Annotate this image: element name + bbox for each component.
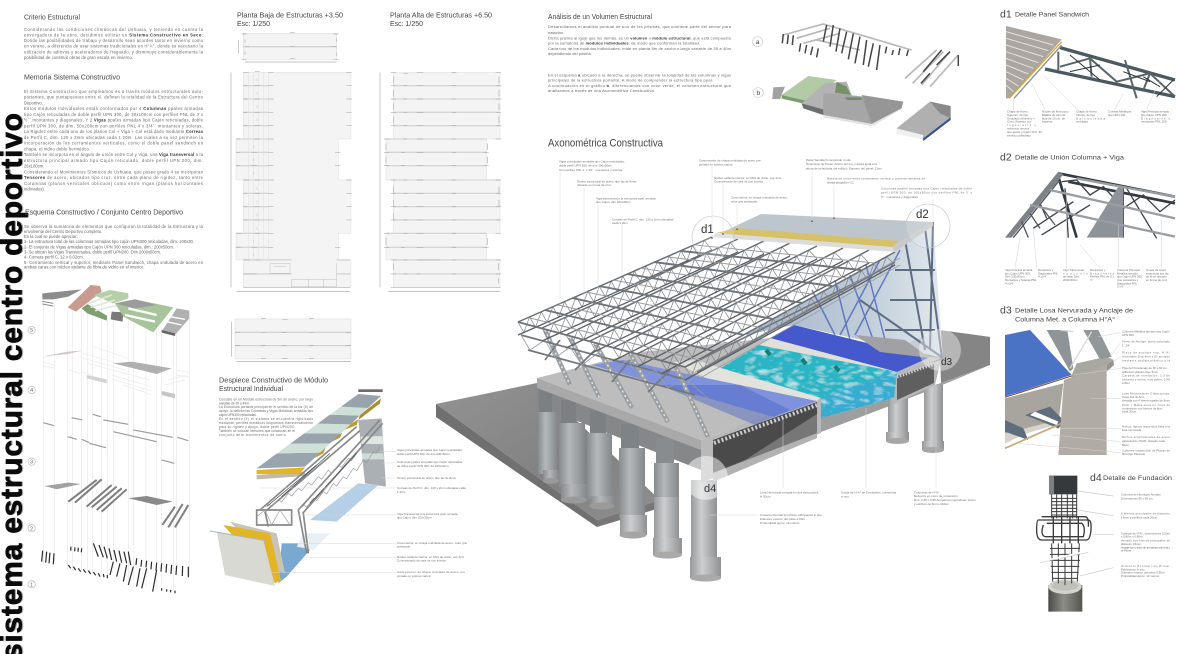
heading: planta alta xyxy=(390,12,492,28)
callouts: d2: estructural tipo lac xyxy=(1146,271,1169,275)
callouts: d3: Losa Nervurada en 2 direcciones. xyxy=(1122,391,1170,395)
callouts: d1: espesor. xyxy=(1042,120,1053,124)
diagram b: envelope volumes: b xyxy=(756,90,760,97)
panel: planta baja xyxy=(231,12,352,362)
wall sandwich panels xyxy=(210,522,285,586)
platform structure xyxy=(537,338,941,483)
callouts: d1: Núcleo de fibra poco xyxy=(1042,110,1069,114)
glazed gable and lattice xyxy=(745,222,943,358)
blue floors xyxy=(592,325,928,425)
callouts: d1: Bitálitis de tubo de xyxy=(1042,113,1066,117)
heading: d4 xyxy=(1090,472,1172,484)
heading: criterio estructural: Criterio Estructural xyxy=(24,12,80,22)
callouts: d1: tipo UPN 100 xyxy=(1108,113,1126,117)
callouts: d2: 4´x3/4´´. xyxy=(1038,275,1049,279)
number markers: 1 xyxy=(30,582,33,588)
text block: memoria: La Rigidez entre cada uno de los planos Col + Viga + Col está dado mediante Correas xyxy=(24,129,204,134)
callouts: d1: Viga Principal armado xyxy=(1141,110,1170,114)
steel frames xyxy=(257,420,383,553)
panel: criterio estructural xyxy=(24,12,204,60)
number markers: 3 xyxy=(30,460,33,466)
callouts: d1: servicio polisulfato xyxy=(1007,134,1031,138)
text block: despiece: conjunto ante movimientos de suelo. xyxy=(219,433,287,437)
callouts: d2: Montantes y Soleras PNL xyxy=(1005,278,1037,282)
callouts: d1: Diagonales y xyxy=(1141,116,1171,120)
swimming pool xyxy=(721,345,897,418)
text block: despiece: variable de 35 a 40m. xyxy=(219,401,250,405)
callouts: d2: 4´x3/4´ xyxy=(1005,281,1014,285)
callouts: d4: Profundidad aprox: 12 metros xyxy=(1121,574,1160,578)
callouts: d3 xyxy=(1122,330,1171,456)
callouts: despiece: Correas de Perfil C, dim. 120 x 2mm ubicadas cada xyxy=(397,486,466,490)
text block: despiece: La Estructura portante principal en el sentido de la luz (X) de xyxy=(219,405,313,409)
callouts: axonometrica: Profundidad aprox: 12 metros xyxy=(760,521,800,525)
text block: despiece: para su rigidez y apoyo, doble perfil UPN200. xyxy=(219,425,295,429)
callouts: d1: Cinc). Espesor con xyxy=(1007,120,1032,124)
detail circle d2 xyxy=(906,204,950,248)
callouts: d3: 8mm y Malla simá en zona de xyxy=(1122,403,1170,407)
text block: despiece: apoyo, lo definen las Columnas y Vigas Metálicas armadas tipo xyxy=(219,409,313,413)
callouts: axonometrica xyxy=(559,158,976,525)
heading: d2 xyxy=(1000,152,1124,164)
callouts: d1: Chapa de Acero xyxy=(1007,110,1028,114)
callouts: axonometrica: Babeta de unión entre cerramiento vertical y cubierta metálica de xyxy=(827,176,925,180)
callouts: axonometrica: in situ. xyxy=(841,494,850,498)
callouts: axonometrica: Cara interior, en chapa ondulada de acero, xyxy=(731,196,788,200)
text block: criterio: Considerando las condiciones climáticas del Ushuaia, y teniendo en cuenta la xyxy=(24,27,204,32)
callouts: d3: compresión con hierros de 8cm xyxy=(1122,406,1163,410)
roof sandwich bands xyxy=(257,394,381,479)
callouts: d3: cemento y arena, muy pobre, 10% xyxy=(1122,377,1170,381)
callouts: d1: montantes PNL 100 xyxy=(1141,120,1167,124)
callouts: despiece: Viga Transversal a la estructura ppal. armada xyxy=(397,512,458,516)
roof sandwich plate xyxy=(711,214,933,252)
heading: axonometrica constructiva: Axonométrica Constructiva xyxy=(548,138,664,150)
callouts: axonometrica: y estribos de 6mm c/20cm xyxy=(914,502,950,506)
text block: criterio xyxy=(24,27,204,60)
callouts: despiece: Núcleo aislante interior, en fibra de vidrio, esp 4cm xyxy=(397,555,465,559)
heading: d1: d1 xyxy=(1000,8,1012,20)
callouts: d4: diámetro 16mm. xyxy=(1121,542,1142,546)
callouts: d1: ondulada xyxy=(1076,120,1088,124)
callouts: axonometrica: ½´´ montantes y diagonales xyxy=(881,195,919,199)
text block: memoria: chapa, el vidrio doble hermético. xyxy=(24,146,90,151)
text block: analisis: dependiendo del prisma. xyxy=(548,51,592,56)
text block: despiece xyxy=(219,398,313,437)
layer 5: envelope volumes xyxy=(42,285,189,336)
callouts: d2: Diagonales PNL xyxy=(1038,271,1059,275)
text block: despiece: En el sentido (Y) el sistema se encuentra rigidizado xyxy=(219,417,313,421)
callouts: d1: lada de 10 cm. de xyxy=(1042,116,1065,120)
heading: planta alta: Esc: 1/250 xyxy=(390,21,423,28)
number markers: 4 xyxy=(30,388,33,394)
callouts: d3: Cañones suspendido de Placas de xyxy=(1122,449,1170,453)
drawing: panel sandwich xyxy=(1006,26,1175,110)
callouts: d2: Perfiles PNL de 3´x xyxy=(1090,275,1115,279)
callouts: d2: armada: Dim: xyxy=(1063,275,1080,279)
callouts: d3: 80cm. xyxy=(1122,443,1130,447)
detail circle d1 xyxy=(692,216,734,258)
text block: esquema: En la cual se puede apreciar: xyxy=(24,234,78,239)
main axonometric drawing xyxy=(436,158,990,582)
callouts: axonometrica: Viga transversal a la estructura ppal. armada xyxy=(596,197,656,201)
diagram a: steel structure xyxy=(753,24,958,87)
ground slabs xyxy=(436,330,990,527)
text block: memoria: 25x100cm. xyxy=(24,164,44,169)
callouts: axonometrica: Diámetro exterior del pilote 0,80m xyxy=(760,517,806,521)
callouts: d2: Viga Transversal xyxy=(1063,268,1084,272)
number markers xyxy=(28,326,35,588)
callouts: axonometrica: Con perfiles PNL 4´ x 3/4´´ montantes y soleras. xyxy=(559,168,623,172)
text block: esquema: ambas caras con núcleo aislante de fibra de vidrio en el interior. xyxy=(24,265,144,270)
panel: detalle d2 xyxy=(1000,152,1175,289)
heading: esquema: Esquema Constructivo / Conjunto Centro Deportivo xyxy=(25,208,183,216)
heading: planta alta: Planta Alta de Estructuras +6.50 xyxy=(390,12,492,20)
callout leader lines xyxy=(560,167,936,515)
callouts: d2: Con montantes y xyxy=(1117,278,1139,282)
callouts: d4: Columna de Hormigón Armado xyxy=(1121,492,1161,496)
panel: detalle d3 xyxy=(1000,304,1171,456)
heading: planta baja: Planta Baja de Estructuras +3.50 xyxy=(237,12,343,20)
callouts: d1: Inferior, de tipo xyxy=(1076,113,1096,117)
callouts: d4: Anclaje como inicio de armadura columna y xyxy=(1121,545,1171,549)
heading: d1: Detalle Panel Sandwich xyxy=(1015,12,1089,18)
detail circle d3 xyxy=(919,329,961,371)
detail circle d1: d1 xyxy=(701,224,714,236)
callouts: axonometrica: Cara exterior de chapa ondulada de acero pre- xyxy=(699,159,761,163)
callouts: despiece: de doble perfil UPN 300, de 100x30cm. xyxy=(397,464,450,468)
callouts: d2: en forma de cruz xyxy=(1146,278,1168,282)
number markers: 2 xyxy=(30,526,33,532)
callouts: despiece: 1,20m xyxy=(397,490,406,494)
callouts: despiece: tipo Cajón, dim 100x25cm xyxy=(397,516,432,520)
callouts: despiece: Cara exterior, de chapa ondulada de acero, pre xyxy=(397,570,465,574)
drawing: losa y anclaje xyxy=(1005,330,1121,455)
exploded structural diagram xyxy=(28,285,189,593)
callouts: d3: Inoxidable Esp:4cm y Ø: anclado xyxy=(1122,355,1170,359)
callouts: d1 xyxy=(1007,110,1171,138)
callouts: d2: Viga Principal armada xyxy=(1005,268,1033,272)
right piles xyxy=(886,385,944,453)
heading: d3: d3 xyxy=(1000,304,1012,316)
callouts: axonometrica: Núcleo aislante interior, en fibra de vidrio, esp 4cm. xyxy=(714,176,782,180)
text block: analisis: principales de la estructura portante. A modo de comprender la estructura tipo ppal. xyxy=(548,78,713,83)
diagram a: steel structure: a xyxy=(756,39,760,46)
text block: memoria: El Sistema Constructivo que empleamos es a través módulos estructurales auto- xyxy=(24,89,204,94)
callouts: d3: Nichos longitudinales de acero xyxy=(1122,435,1170,439)
callouts: d3: fibra tipo Plancelit xyxy=(1122,452,1145,456)
layer 3: transverse beams xyxy=(43,414,188,463)
callouts: despiece: Conmplexado de cara int con interior. xyxy=(397,558,447,562)
diagram b: envelope volumes xyxy=(753,76,951,141)
callouts: axonometrica: cada 1,20m xyxy=(612,221,628,225)
callouts: despiece: Cara interior, en chapa ondulada de acero, color gris xyxy=(397,541,467,545)
callouts: d3: a 8cm xyxy=(1122,381,1130,385)
drawing: fundacion xyxy=(1037,476,1113,612)
heading: despiece xyxy=(219,376,328,393)
callouts: axonometrica: chapa plegada n°22. xyxy=(827,181,855,185)
callouts: d2: de 8mm ubicado xyxy=(1146,275,1167,279)
text block: analisis: natación. xyxy=(548,30,564,35)
callouts: d2: 2000x50cm xyxy=(1063,278,1078,282)
callouts: axonometrica: Correas de Perfil C, dim. 120 x 2mm ubicadas xyxy=(612,217,674,221)
heading: d4: d4 xyxy=(1090,472,1102,484)
text block: esquema: envolvente del Centro Deportivo completo. xyxy=(24,229,102,234)
callouts: despiece: doble perfil UPN 300, de dim 200x50cm. xyxy=(397,452,451,456)
callouts: d1: Ingeniería y xyxy=(1007,123,1037,127)
callouts: d4: 16mm y estribos cada 20cm xyxy=(1121,515,1158,519)
callouts: axonometrica: Refuerzo en muro de contención xyxy=(914,494,958,498)
heading: despiece: Despiece Constructivo de Módulo xyxy=(219,376,328,384)
callouts: d3: Piso de Porcelanato de 60 x 60 cm. xyxy=(1122,366,1168,370)
callouts: d2: Montantes y xyxy=(1038,268,1054,272)
callouts: axonometrica: Cimiento Puntual tipo Pilote, fabricación in situ. xyxy=(760,513,823,517)
callouts: d1: refuerzos nervios xyxy=(1007,126,1030,130)
detail circle d2: d2 xyxy=(916,209,929,221)
text block: despiece: También se colocan tensores que colaboran en el xyxy=(219,429,295,433)
callouts: d3: Perno de Anclaje, acero calculado xyxy=(1122,340,1170,344)
callouts: d3: Columna Metálica armado tipo Cajón xyxy=(1122,330,1170,334)
callouts: axonometrica: Grada de H°A° de 5 peldaños, construida xyxy=(841,490,896,494)
callouts: d4: Cimiento Puntual tipo Pilote. xyxy=(1121,564,1170,568)
callouts: d1: Ondulado (Aluminio + xyxy=(1007,116,1035,120)
panel: analisis de un volumen xyxy=(548,12,958,141)
heading: d3: Detalle Losa Nervurada y Anclaje de xyxy=(1015,308,1133,314)
callouts: axonometrica: Panel Sandwich construido in situ. xyxy=(806,158,852,162)
text block: memoria: tipo Cajón reticuladas de doble perfil UPN 300, de 30x100cm con perfiles PNL de 3´x xyxy=(24,112,204,117)
text block: analisis: En el esquema a ubicado a la derecha, se puede observar la totalidad de las columnas y vigas xyxy=(548,72,731,78)
callouts: d4: Armado con hierros principales de xyxy=(1121,539,1170,543)
callouts: d3: Placa de anclaje sup. H°A° xyxy=(1122,351,1170,355)
callouts: d2: Dim: 200x50cm. xyxy=(1005,275,1025,279)
callouts: d1: Chapa de Acero xyxy=(1076,110,1097,114)
left piles and shafts xyxy=(537,385,721,582)
text block: criterio: Donde las posibilidades de trabajo y desarrollo sean acordes tanto en invierno como xyxy=(24,38,204,43)
callouts: d4: Dimensiones 80 x 60 cm. xyxy=(1121,496,1154,500)
text block: memoria: Columnas (planos verticales oblicuos) como entre Vigas (planos horizontales xyxy=(24,181,203,186)
text block: memoria: Estos módulos individuales están conformados por 4 Columnas ppales armadas xyxy=(24,106,203,111)
callouts: d3: Capa lisa de 5cm xyxy=(1122,395,1145,399)
callouts: d3: cada 20cm. xyxy=(1122,410,1137,414)
heading: analisis: Análisis de un Volumen Estructural xyxy=(548,12,652,21)
callouts: axonometrica: doble perfil UPN 300, de dim 200x50cm. xyxy=(559,163,613,167)
text block: memoria: Considerando el Movimientos Sísmicos de Ushuaia, que posee grado 4 se incorporan xyxy=(24,169,204,174)
text block: criterio: en verano, a diferencia de usar sistemas tradicionales en H°A°, donde es necesario la xyxy=(24,44,204,49)
callouts: d3: UPN 300 xyxy=(1122,333,1134,337)
callouts: d1: Galvanizada xyxy=(1076,116,1105,120)
callouts: d3: losa nervurada. xyxy=(1122,428,1142,432)
detail circle d3: d3 xyxy=(941,357,953,368)
callouts: d4: al Pilote. xyxy=(1121,549,1132,553)
callouts: d2 xyxy=(1005,268,1169,289)
panel: detalle d1 xyxy=(1000,8,1175,138)
text block: memoria: ½´´ montantes y diagonales. Y 2 Vigas ppales armadas tipo Cajón reticuladas, doble xyxy=(24,118,204,123)
callouts: d4: 6 Hierros principales de diámetro xyxy=(1121,511,1170,515)
callouts: d3: galvanizado 70x30, ubicado cada xyxy=(1122,439,1165,443)
text block: analisis: por la sumatoria de módulos individuales, de modo que conforman la totalidad. xyxy=(548,40,700,46)
text block: despiece: Consiste en un Módulo estructural de 5m de ancho, por largo xyxy=(219,398,313,402)
callouts: d2: tipo Cajón UPN 300 xyxy=(1005,271,1030,275)
roof truss grid xyxy=(518,237,895,380)
callouts: d3: Adhesivo plástico tipo: 5mm. xyxy=(1122,370,1159,374)
detail circle d4 xyxy=(684,456,728,500)
panel: detalle d4 xyxy=(1037,472,1172,612)
text block: analisis xyxy=(548,24,732,93)
callouts: d3: 1´ 1/4´ xyxy=(1122,344,1130,348)
drawing: union columna viga xyxy=(1005,172,1175,268)
text block: memoria: perfil UPN 300, de dim. 50x200cm con perfiles PNL 4´x 3/4´´ montantes y soleras. xyxy=(24,123,203,128)
callouts: axonometrica: ubicado en forma de cruz. xyxy=(577,183,612,187)
callouts: despiece: Tensor estructural de acero, tipo lac de 8mm xyxy=(397,476,457,480)
callouts: d2: Tensor de acero xyxy=(1146,268,1167,272)
text block: memoria: inclinados). xyxy=(24,187,45,192)
layer 1: columns xyxy=(42,543,188,593)
callouts: axonometrica: Tensor estructural de acero, tipo lac de 8mm, xyxy=(577,180,637,184)
callouts: axonometrica: perfil UPN 300, de 100x30cm con perfiles PNL de 3´ x xyxy=(881,190,972,194)
number markers: 5 xyxy=(30,328,33,334)
floor plan: planta alta xyxy=(380,72,501,292)
callouts: despiece: Vigas principales armadas tipo Cajón reticuladas, xyxy=(397,448,463,452)
exploded module drawing xyxy=(210,389,396,586)
layer 2: beams xyxy=(44,479,188,527)
callouts: axonometrica: Dimensión de Panel: Ancho útil 1m, y altura igual a la xyxy=(806,162,877,166)
callouts: d1: Correas Metálicas xyxy=(1108,110,1132,114)
callouts: axonometrica: color gris prelacado. xyxy=(731,199,758,203)
text block: analisis: A continuación en el gráfico b, diferenciamos con color verde, el volumen estructural que xyxy=(548,83,732,88)
text block: esquema xyxy=(24,224,204,270)
callouts: d2: Columna Principal xyxy=(1117,268,1140,272)
callouts: axonometrica: Columnas de H°A° xyxy=(914,490,940,494)
text block: despiece: mediante, perfiles metálicos dispuestos transversalmente xyxy=(219,421,313,425)
text block: memoria: Tensores de acero, ubicados tipo cruz, entre cada plano de rigidez, tanto entre xyxy=(24,175,204,180)
callouts: despiece xyxy=(397,448,467,578)
callouts: d2: tipo Cajón UPN 300 xyxy=(1117,275,1142,279)
heading: d4: Detalle de Fundación xyxy=(1103,475,1172,482)
callouts: despiece: prelacado xyxy=(397,544,411,548)
glazed gable panel xyxy=(358,418,386,487)
heading: d2: d2 xyxy=(1000,152,1012,164)
panel: planta alta xyxy=(380,12,501,292)
callouts: axonometrica: H 30cm xyxy=(760,494,771,498)
front struts xyxy=(521,258,900,437)
layer 4: purlins xyxy=(42,347,189,398)
floor plans: planta baja xyxy=(231,33,352,362)
text block: memoria: También se incorpora en el ángulo de unión entre Col y Viga, una Viga transversal a la xyxy=(24,152,204,157)
text block: criterio: envergadura de la obra, decidimos utilizar un Sistema Constructivo en Seco. xyxy=(24,32,203,37)
callouts: despiece: Columnas ppales armadas tipo Cajón reticuladas xyxy=(397,460,463,464)
heading: d2: Detalle de Unión Columna + Viga xyxy=(1015,154,1124,162)
callouts: d3: mediante anclaje plástico a la xyxy=(1122,359,1170,363)
panel: despiece constructivo xyxy=(210,376,467,586)
text block: memoria: Deportivo. xyxy=(24,100,43,106)
callouts: d3: Carpeta de nivelación: 1:3 de xyxy=(1122,374,1170,378)
text block: analisis: Dicha prisma al igual que los demás, es un volumen o módulo estructural, que está compuesto xyxy=(548,36,732,40)
callouts: d1: tipo ajuste y Cajón Prof. 90 xyxy=(1007,130,1042,134)
callouts: d4: Fabricación in situ. xyxy=(1121,567,1145,571)
heading: memoria: Memoria Sistema Constructivo xyxy=(24,72,120,82)
text block: criterio: utilización de aditivos y aceleradores de fraguado, y disminuye considerablemente la xyxy=(24,49,204,54)
panel: esquema constructivo xyxy=(24,208,204,593)
text block: memoria: estructura principal armado tipo Cajón reticulado, doble perfil UPN 200, dim. xyxy=(24,158,203,163)
text block: analisis: Cada uno de los módulos individuales, mide en planta 5m de ancho x largo variable de 35 a 40m xyxy=(548,46,732,51)
text block: esquema: 2- El conjunto de Vigas armadas tipo Cajón UPN 300 reticuladas, dim.: 200x50cm. xyxy=(24,244,174,249)
callouts: d2: Diagonales xyxy=(1090,271,1115,275)
heading: d3 xyxy=(1000,304,1133,324)
text block: memoria: de Perfil C, dim. 120 x 2mm ubicadas cada 1.20m. Las cuales a su vez permiten la xyxy=(24,135,204,140)
blue floor panel xyxy=(310,483,378,522)
heading: planta baja xyxy=(237,12,343,28)
callouts: axonometrica: Losa Nervurada armada en dos direcciones. xyxy=(760,490,819,494)
text block: analisis: Desarrollamos el análisis puntual de uno de los prismas, que contiene parte del sector para xyxy=(548,24,732,29)
callouts: axonometrica: tipo Cajón, dim 100x25cm xyxy=(596,200,631,204)
text block: memoria xyxy=(24,89,204,192)
callouts: d3: Armada con 4 hierros ppales de 8mm xyxy=(1122,399,1171,403)
callouts: d2: Diagonales PNL xyxy=(1117,281,1138,285)
text block: esquema: 4- Correas perfil C, 12 x 0.02cm. xyxy=(24,255,84,260)
text block: memoria: portantes, que yuxtapuestos entre sí, definen la totalidad de la Estructura del Centro xyxy=(24,95,204,100)
heading: d3: Columna Met. a Columna H°A° xyxy=(1015,316,1115,324)
text block: criterio: posibilidad de construir obras de gran escala en invierno. xyxy=(24,55,133,60)
callouts: d1: tipo Cajón UPN 200. xyxy=(1141,113,1168,117)
callouts: axonometrica: Columnas ppales armadas tipo Cajón reticuladas de doble xyxy=(881,186,972,190)
callouts: d2: Montantes y xyxy=(1090,268,1106,272)
text block: memoria: incorporación de los cerramientos verticales, como el doble panel sandwich en xyxy=(24,141,204,146)
callouts: d1: Superior, de tipo xyxy=(1007,113,1028,117)
text block: analisis: analizamos a través de una Axonométrica Constructiva. xyxy=(548,88,655,93)
callouts: d2: conjunto xyxy=(1063,271,1088,275)
callouts: despiece: pintada en colores varios. xyxy=(397,574,431,578)
callouts: axonometrica: altura de la fachada del edificio. Espesor del panel: 13cm xyxy=(806,166,883,170)
callouts: d2: ½´´ xyxy=(1090,278,1094,282)
callouts: axonometrica: Vigas principales armadas tipo Cajón reticuladas, xyxy=(559,160,625,164)
text block: esquema: 5- Cerramiento vertical y superior, mediante Panel Sandwich, chapa ondulada de acero en xyxy=(24,260,204,265)
text block: esquema: 1- La estructura total de las columnas armadas tipo cajón UPN300 reticuladas, dim. 100x30. xyxy=(24,239,194,244)
heading: planta baja: Esc: 1/250 xyxy=(237,21,270,28)
callouts: axonometrica: Conmplexado de cara int con interior. xyxy=(714,180,764,184)
text block: esquema: 3- Se ubican las Vigas Transversales, doble perfil UPN200. Dim 2000x50cm. xyxy=(24,250,161,254)
callouts: d4: Diámetro exterior del pilote 0,80m xyxy=(1121,571,1165,575)
callouts: axonometrica: Dim: 0,45 x 0,95 Armadura longitudinal: 12mm xyxy=(914,498,976,502)
panel: memoria sistema constructivo xyxy=(24,72,204,192)
callouts: d3: Nichos, ligeros requeridos fibra a la xyxy=(1122,425,1170,429)
callouts: d4: x 0,80m x 0,80m. xyxy=(1121,535,1143,539)
callouts: d2: Metálica armada xyxy=(1117,271,1138,275)
heading: despiece: Estructural Individual xyxy=(219,384,283,393)
detail circle d4: d4 xyxy=(704,483,716,495)
text block: despiece: cajón UPN300 reticuladas. xyxy=(219,413,257,417)
callouts: d4: Cabezal de H°A°, dimensiones 2,00m xyxy=(1121,531,1171,535)
callouts: d2: 3´x½´´ xyxy=(1117,285,1125,289)
callouts: axonometrica: pintada en colores varios. xyxy=(699,162,733,166)
callouts: d4 xyxy=(1121,492,1171,578)
heading: d1 xyxy=(1000,8,1089,20)
text block: esquema: Se observa la sumatoria de elementos que configuran la totalidad de la Estructura y la xyxy=(24,224,204,229)
